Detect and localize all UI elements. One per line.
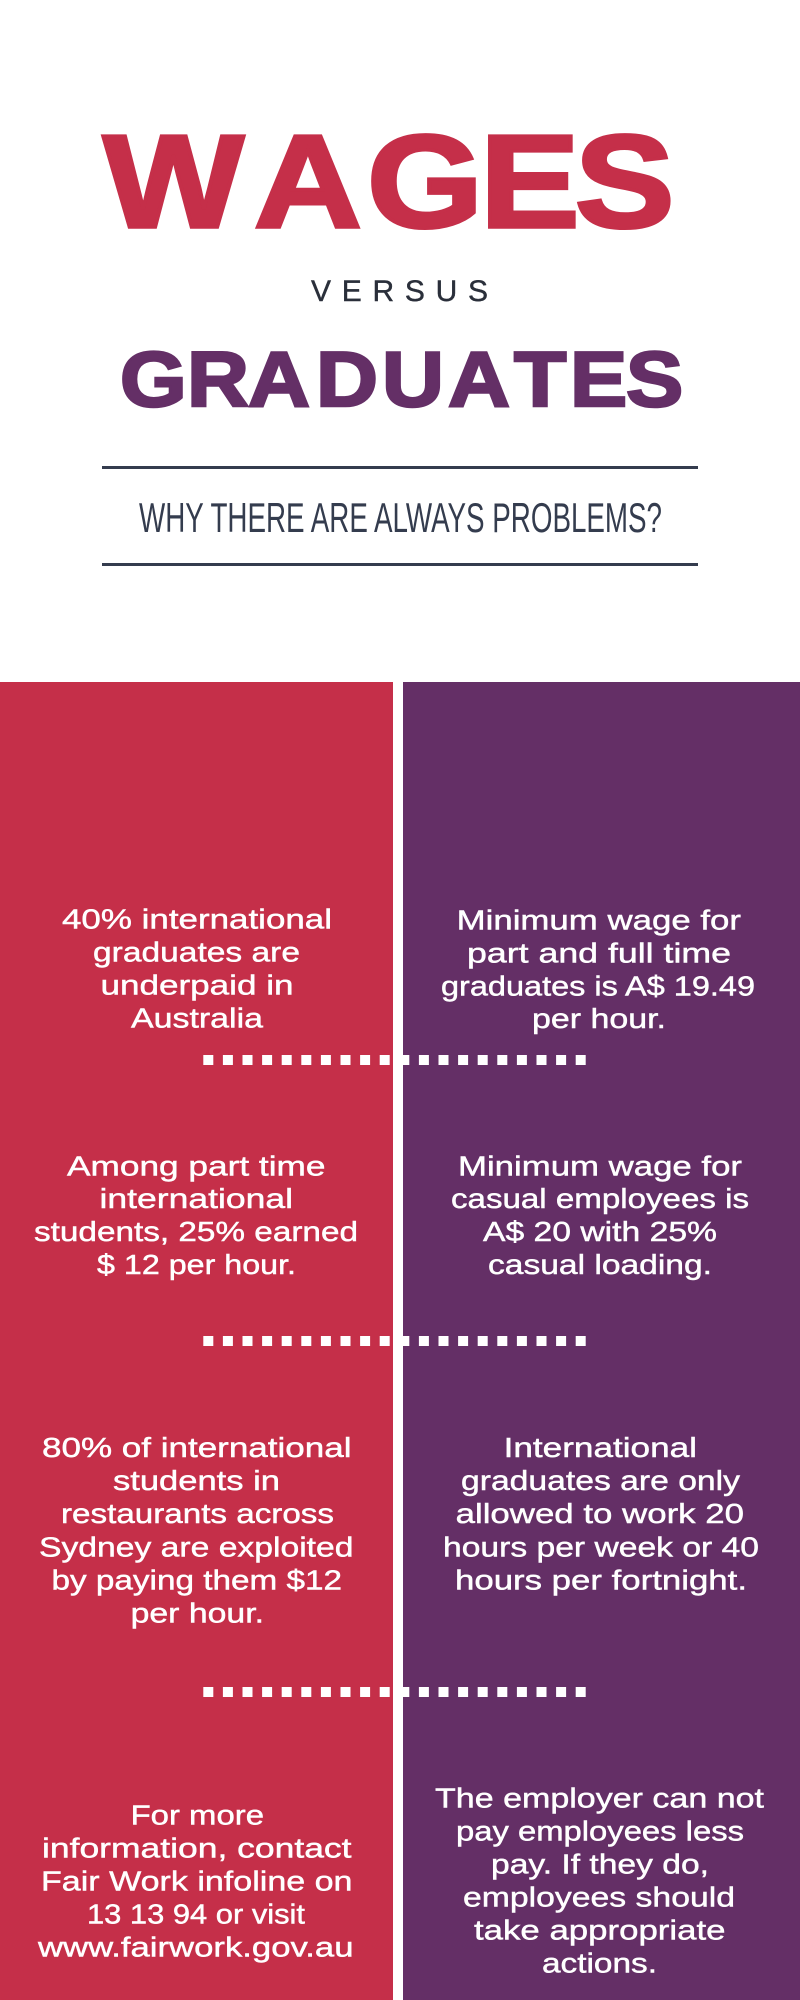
text: 40% underpaid: graduates are <box>93 936 300 968</box>
text: part time students <box>34 1150 358 1280</box>
text: 80% exploited: 80% of international <box>42 1432 352 1463</box>
text: minimum wage casual: casual loading. <box>488 1249 712 1280</box>
text: minimum wage graduates: part and full time <box>467 938 731 968</box>
text: contact info: For more <box>131 1800 264 1830</box>
text: minimum wage graduates <box>441 904 755 1034</box>
text: work hour limits: hours per week or 40 <box>443 1532 759 1562</box>
text: 80% exploited: restaurants across <box>61 1498 334 1529</box>
text: employer obligations: actions. <box>542 1948 657 1978</box>
text: work hour limits: allowed to work 20 <box>456 1498 744 1529</box>
text: work hour limits: International <box>504 1432 697 1463</box>
text: 40% underpaid: underpaid in <box>100 970 294 1000</box>
text: employer obligations: take appropriate <box>474 1914 726 1946</box>
title: wages: WAGES <box>103 108 674 255</box>
text: part time students: international <box>100 1183 293 1214</box>
text: work hour limits <box>443 1432 759 1596</box>
text: contact info <box>37 1800 353 1962</box>
text: 80% exploited: by paying them $12 <box>52 1564 342 1596</box>
text: part time students: Among part time <box>67 1150 326 1182</box>
text: minimum wage casual: Minimum wage for <box>458 1150 742 1182</box>
text: work hour limits: hours per fortnight. <box>455 1564 747 1596</box>
text: contact info: 13 13 94 or visit <box>87 1898 305 1930</box>
text: minimum wage graduates: per hour. <box>532 1003 666 1034</box>
text: contact info: information, contact <box>42 1832 352 1864</box>
text: minimum wage casual: casual employees is <box>451 1183 749 1214</box>
text: employer obligations: employees should <box>463 1882 735 1912</box>
text: employer obligations: The employer can not <box>435 1782 764 1814</box>
text: 80% exploited: per hour. <box>131 1598 264 1628</box>
text: work hour limits: graduates are only <box>461 1465 740 1496</box>
panel: purple column <box>403 682 800 2000</box>
text: 40% underpaid <box>62 904 332 1034</box>
title: graduates: GRADUATES <box>120 337 683 423</box>
heading: versus: VERSUS <box>311 275 488 308</box>
panel: red column <box>0 682 393 2000</box>
text: minimum wage casual <box>451 1150 749 1280</box>
text: part time students: students, 25% earned <box>34 1216 358 1247</box>
text: employer obligations <box>435 1782 764 1978</box>
text: contact info: Fair Work infoline on <box>41 1866 352 1896</box>
text: minimum wage graduates: Minimum wage for <box>457 904 741 936</box>
text: 80% exploited: Sydney are exploited <box>39 1532 354 1562</box>
text: employer obligations: pay employees less <box>456 1816 744 1846</box>
text: employer obligations: pay. If they do, <box>491 1848 709 1880</box>
header <box>102 108 698 566</box>
text: minimum wage graduates: graduates is A$ 19.49 <box>441 970 755 1002</box>
text: contact info: www.fairwork.gov.au <box>37 1932 353 1962</box>
text: part time students: $ 12 per hour. <box>97 1249 296 1280</box>
subtitle block with rules <box>102 466 698 566</box>
text: 40% underpaid: 40% international <box>62 904 332 934</box>
text: minimum wage casual: A$ 20 with 25% <box>483 1216 717 1247</box>
text: 40% underpaid: Australia <box>131 1002 264 1034</box>
text: 80% exploited: students in <box>113 1465 280 1496</box>
text: 80% exploited <box>39 1432 354 1628</box>
